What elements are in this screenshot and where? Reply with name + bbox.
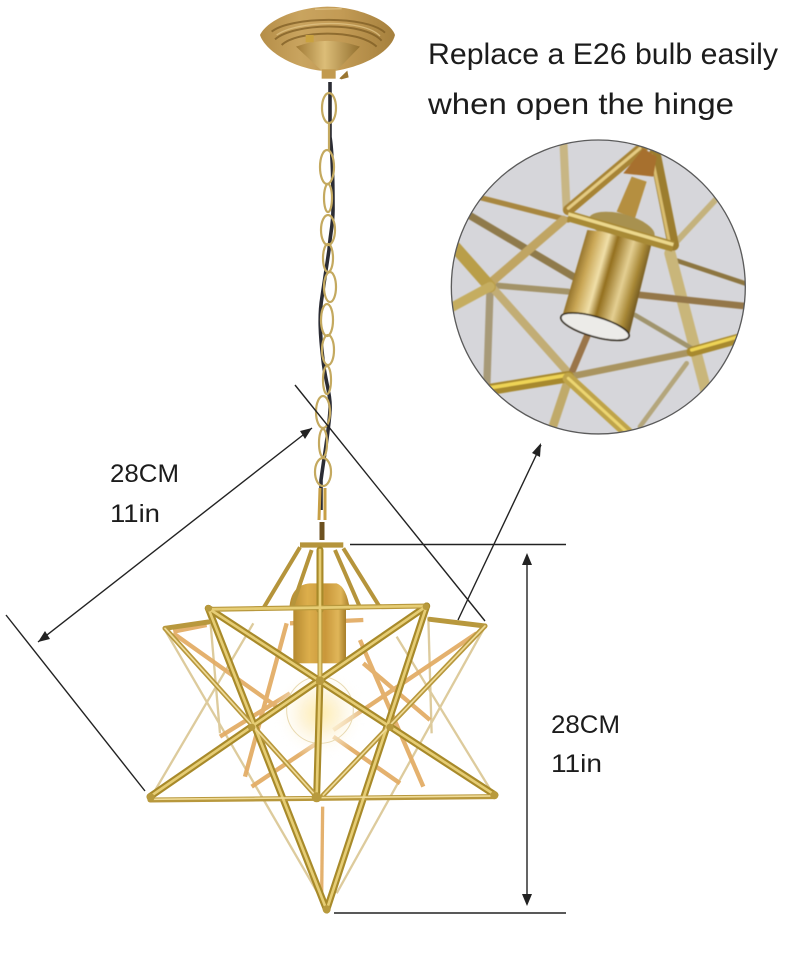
close-up thin frame bars <box>463 140 750 430</box>
heading: bulb replacement note: when open the hinge <box>427 88 734 121</box>
dimension: height, right vertical <box>334 544 566 913</box>
detail circle: socket close-up <box>450 140 750 435</box>
lamp glass and pale back edges <box>153 617 492 908</box>
height label: 11in <box>551 750 602 778</box>
close-up ceiling of the frame <box>623 148 657 177</box>
heading: bulb replacement note: Replace a E26 bulb easily <box>428 38 778 71</box>
height label <box>551 711 620 778</box>
top cap and upper frame <box>263 545 380 608</box>
width label: 28CM <box>110 460 179 488</box>
close-up socket body <box>589 211 656 236</box>
frame joints <box>147 603 498 913</box>
arrow: pointer to detail circle <box>458 443 541 620</box>
width label: 11in <box>110 500 160 528</box>
bulb glow <box>273 667 367 760</box>
star pendant lamp <box>147 545 498 913</box>
front star frame <box>150 550 495 910</box>
close-up bright frame bars <box>450 147 743 435</box>
brass socket <box>289 583 350 663</box>
hanging chain and cord <box>315 82 336 540</box>
close-up bar across socket <box>568 216 673 247</box>
ceiling canopy <box>260 7 395 79</box>
orange back frame <box>173 620 477 897</box>
width label <box>110 460 179 528</box>
heading: bulb replacement note <box>427 38 778 121</box>
height label: 28CM <box>551 711 620 739</box>
dimension: width, left diagonal <box>6 385 485 791</box>
